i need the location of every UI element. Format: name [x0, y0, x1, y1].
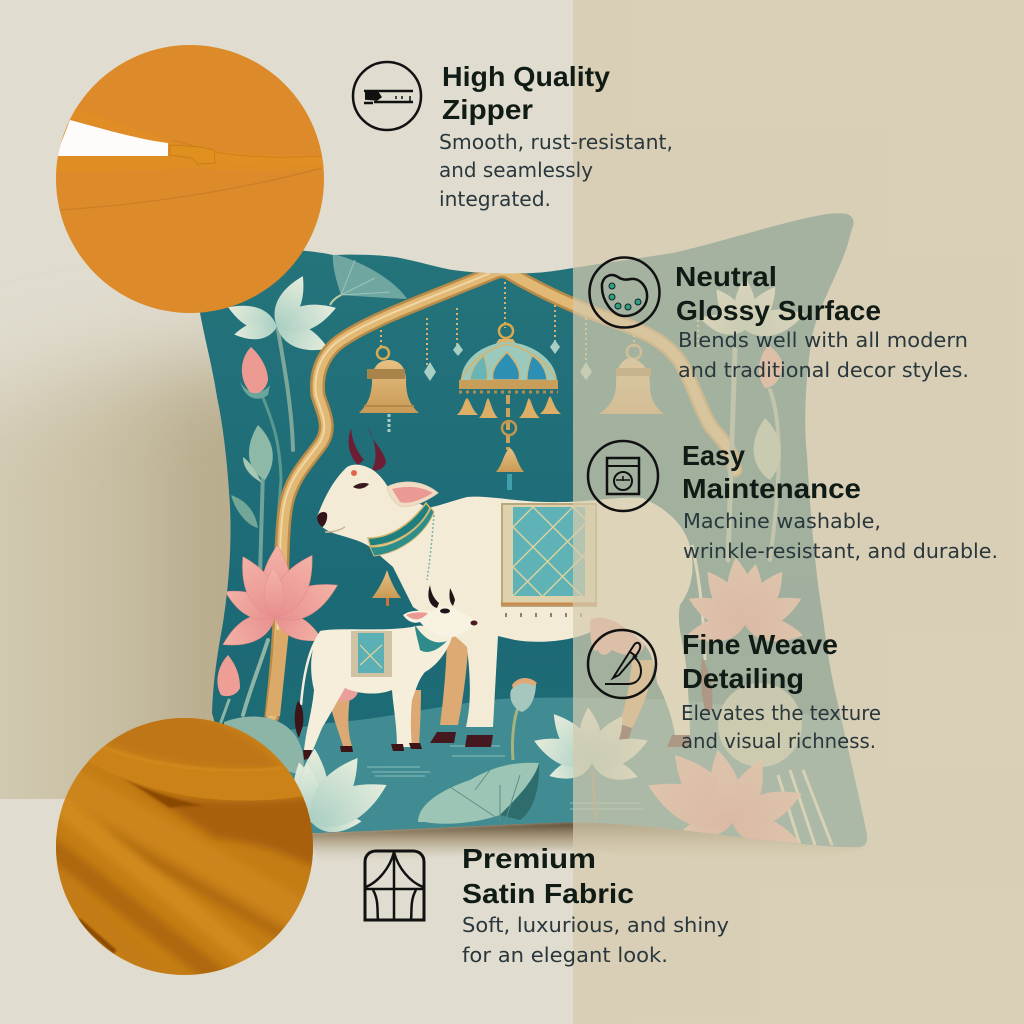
zipper seam	[173, 140, 322, 157]
feature: premium satin fabric	[365, 843, 729, 967]
calf head	[403, 606, 478, 652]
small pink bud bottom left	[217, 655, 240, 696]
dark shadow beneath top fold	[120, 778, 320, 870]
zipper tape right	[213, 150, 322, 165]
feature: premium satin fabric: Satin Fabric	[462, 878, 634, 909]
calf far legs	[328, 690, 421, 746]
strand drops	[424, 340, 592, 381]
faded bell on the right	[599, 345, 664, 414]
cow far hind leg	[622, 660, 654, 729]
heading: Premium	[462, 843, 596, 874]
dark lower edge	[78, 920, 115, 952]
pink lotus bud	[240, 347, 270, 399]
cow collar	[368, 503, 434, 606]
description: Blends well with all modern	[678, 328, 968, 352]
description: Machine washable,	[683, 509, 881, 533]
icon: washing machine	[588, 441, 658, 511]
cushion shadow on the floor	[300, 820, 870, 866]
lotus pod	[510, 678, 537, 760]
feature: high quality zipper	[353, 61, 673, 211]
lily pad left	[224, 716, 304, 775]
calf tail	[295, 634, 320, 738]
background wall and floor	[0, 316, 230, 799]
cow body	[317, 465, 693, 735]
calf saddle	[351, 631, 392, 677]
cow face details	[317, 470, 369, 532]
large lily pad	[418, 763, 539, 824]
lotus stem stripes	[778, 770, 832, 845]
feature: high quality zipper: and seamlessly	[439, 158, 593, 182]
calf hooves	[303, 743, 422, 760]
pink lotus right	[684, 556, 806, 647]
near hoof	[465, 735, 493, 747]
translucent cream overlay panel	[573, 0, 1024, 1024]
fold ridge	[100, 746, 282, 770]
icon: pen nib	[588, 630, 656, 698]
icon: palette	[590, 258, 660, 328]
feature: high quality zipper: integrated.	[439, 187, 551, 211]
description: Soft, luxurious, and shiny	[462, 913, 729, 937]
zipper opening	[56, 120, 168, 156]
calf udder	[338, 688, 358, 702]
feature: high quality zipper: Zipper	[442, 94, 533, 125]
feature: fine weave detailing: Detailing	[682, 663, 804, 694]
gold pillar base	[266, 630, 289, 716]
cow ear	[387, 482, 438, 507]
feature: easy maintenance: wrinkle-resistant, and durable.	[683, 539, 998, 563]
water ripples	[367, 746, 643, 809]
top fold	[85, 700, 330, 801]
feature: easy maintenance	[588, 440, 998, 563]
far front hoof	[430, 732, 456, 743]
zipper pull	[170, 145, 215, 164]
feature: neutral glossy surface: Glossy Surface	[676, 295, 881, 326]
pink lotus large	[222, 544, 338, 646]
icon: curtains	[365, 851, 424, 920]
top fold shade	[100, 710, 282, 769]
pale lotus bottom	[287, 748, 394, 838]
feature: neutral glossy surface: and traditional decor styles.	[678, 358, 969, 382]
fabric crease line	[60, 168, 322, 210]
cow tail	[692, 545, 713, 712]
cushion artwork	[190, 205, 880, 860]
green lotus bud	[231, 425, 273, 528]
far hind hoof	[619, 725, 632, 740]
calf horns	[428, 585, 455, 608]
zipper flap	[68, 108, 175, 145]
feature: neutral glossy surface	[590, 258, 969, 382]
pond ground	[289, 698, 868, 847]
near hind hoof	[667, 735, 690, 747]
description: Smooth, rust-resistant,	[439, 130, 673, 154]
zipper detail circle	[56, 45, 324, 313]
description: Elevates the texture	[681, 701, 881, 725]
green bud right	[754, 418, 781, 480]
pale lotus top right	[698, 277, 808, 342]
heading: Fine Weave	[682, 629, 838, 660]
horns of cow	[349, 427, 386, 471]
feature: easy maintenance: Maintenance	[682, 473, 861, 504]
calf body	[304, 626, 456, 750]
feature: fine weave detailing: and visual richness.	[681, 729, 876, 753]
darkest crease	[118, 776, 205, 808]
large brass bell	[359, 347, 419, 432]
pale lotus center	[530, 707, 652, 786]
lotus stems left	[221, 330, 293, 722]
pale lotus top left	[228, 276, 336, 350]
cow udder	[590, 618, 645, 655]
fabric detail circle	[10, 700, 350, 1010]
ornate dome with small bells	[457, 324, 561, 490]
heading: Neutral	[675, 261, 777, 292]
hanging strands	[381, 282, 698, 365]
right lily pad	[718, 683, 802, 767]
heading: High Quality	[442, 61, 610, 92]
pink lotus bottom right	[641, 744, 808, 856]
right side lotus stems	[728, 350, 779, 560]
feature: premium satin fabric: for an elegant look.	[462, 943, 668, 967]
lily pad top left	[330, 254, 407, 305]
cow far front leg	[440, 636, 468, 725]
gold arch	[271, 270, 735, 716]
diagonal satin folds	[10, 760, 350, 1010]
cow saddle cloth	[501, 503, 597, 615]
heading: Easy	[682, 440, 745, 471]
pink bud right	[759, 345, 782, 388]
icon: zipper	[353, 62, 421, 130]
zipper lower tape	[56, 156, 324, 172]
feature: fine weave detailing	[588, 629, 881, 753]
